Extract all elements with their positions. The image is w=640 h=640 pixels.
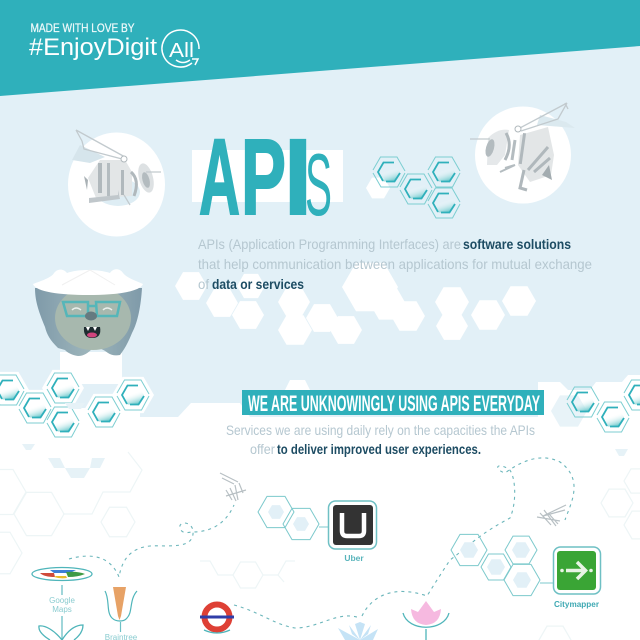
eyes [72,308,112,310]
small grey bee right path [537,505,566,526]
top hexagon cluster icon [373,157,460,218]
Google Maps label: Google [49,596,75,605]
right hexagon cluster [551,380,640,432]
intro paragraph: software solutions [463,236,571,252]
snowflake flower [338,622,378,640]
Braintree flower [105,587,138,640]
teal header band [0,0,640,96]
title backing plate [192,150,343,202]
section sub text: Services we are using daily rely on the capacities the APIs [226,422,535,438]
intro paragraph [198,236,592,292]
Citymapper hexagons [451,534,553,596]
white lid [33,269,143,295]
bowl [35,288,142,356]
white lower section [0,370,640,640]
Citymapper app [451,534,600,609]
section sub text: to deliver improved user experiences. [277,441,481,457]
title letters API: P [241,116,286,237]
dashed flight paths [69,458,574,628]
All circle mark [162,30,199,67]
intro paragraph: that help communication between applications for mutual exchange [198,256,592,272]
bear face [55,286,131,350]
intro paragraph: of [198,276,209,292]
nose [85,312,97,320]
left bee in white circle [68,130,165,236]
pale outline honeycomb [0,452,640,640]
white honeycomb in the light blue area [60,178,536,384]
mascot: bear in glass bowl [33,269,143,356]
title letters API: A [199,116,240,237]
right bee in white circle [470,103,575,204]
leaves [39,625,83,640]
Google Maps label: Maps [52,605,72,614]
mouth [84,327,100,338]
Google Maps flower [32,568,92,640]
Uber label: Uber [344,553,364,563]
faint blue hexagon fragments [22,403,628,478]
glasses [63,302,120,316]
made with love logo [29,21,199,67]
section sub text: offer [250,441,275,457]
APIs title [192,116,343,237]
Uber hexagons [258,496,328,540]
Braintree icon [113,587,126,620]
Google Maps icon [32,568,92,580]
Citymapper icon [554,547,600,594]
logo tagline: MADE WITH LOVE BY [30,21,134,35]
title letters API: I [284,116,312,237]
Citymapper label: Citymapper [554,599,600,609]
All circle mark: All [169,40,194,62]
hashtag: #EnjoyDigit [29,34,157,61]
Uber app [258,496,376,563]
intro paragraph: APIs (Application Programming Interfaces) are [198,236,461,252]
small grey bee top of path [220,473,246,501]
title letters API [199,116,312,237]
section sub text [226,422,535,457]
left hexagon cluster [0,373,149,437]
Transport for London flower [200,604,234,633]
APIs title: S [305,135,332,234]
intro paragraph: data or services [212,276,304,292]
Uber icon [328,501,376,549]
lotus flower [403,601,449,640]
